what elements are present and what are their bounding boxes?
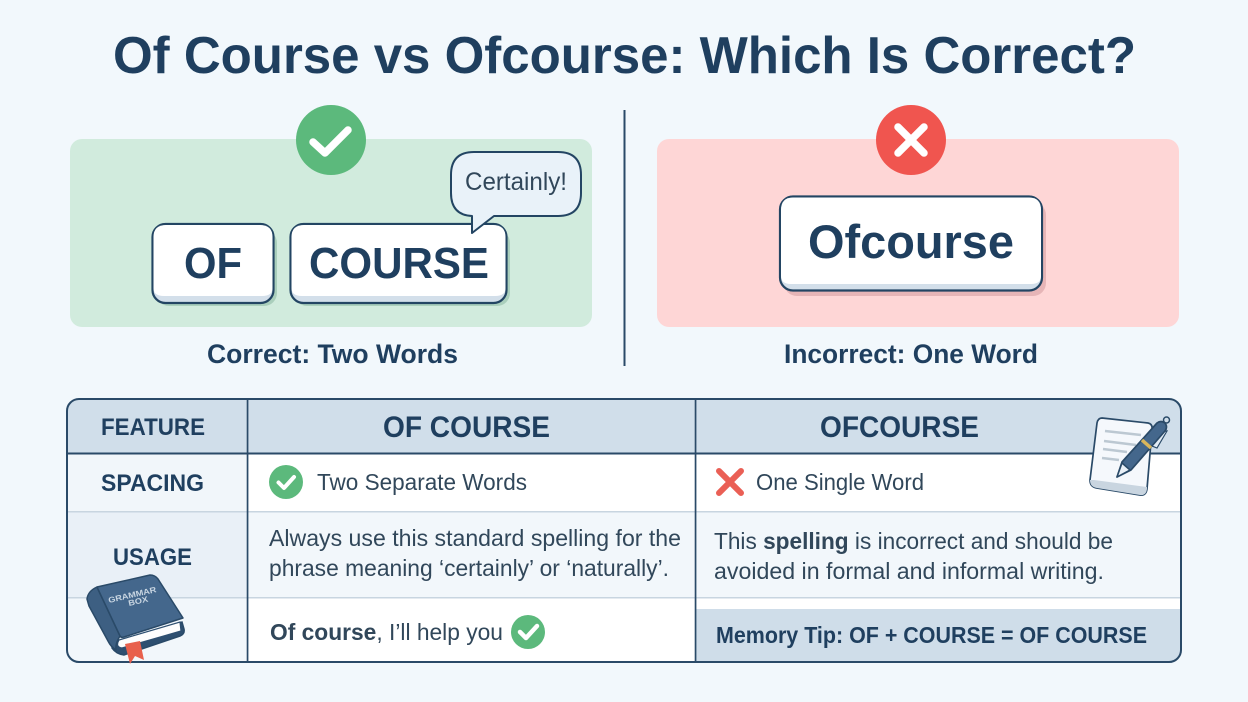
caption: correct: Correct: Two Words (207, 339, 458, 369)
usage: ofcourse: avoided in formal and informal writing. (714, 558, 1104, 584)
row label: spacing: SPACING (101, 470, 204, 497)
word card: COURSE (290, 224, 510, 306)
word card: OF (152, 224, 277, 306)
center divider (624, 110, 626, 366)
usage: of course: phrase meaning ‘certainly’ or ‘naturally’. (269, 555, 669, 581)
row label: usage: USAGE (113, 544, 192, 571)
icon: small green check (269, 465, 303, 499)
word card: OF: OF (184, 239, 242, 288)
icon: green check (296, 105, 366, 175)
usage: of course: Always use this standard spelling for the (269, 525, 681, 551)
speech bubble: Certainly! (465, 168, 567, 196)
icon: example check (511, 615, 545, 649)
usage: ofcourse (714, 528, 1113, 584)
table body background (67, 399, 1181, 662)
table header row (67, 399, 1181, 453)
speech bubble (451, 152, 581, 233)
icon: small red cross (719, 471, 741, 493)
header: feature: FEATURE (101, 414, 205, 441)
caption: incorrect: Incorrect: One Word (784, 339, 1038, 369)
icon: red cross (876, 105, 946, 175)
usage: ofcourse: This spelling is incorrect and should be (714, 528, 1113, 554)
comparison table (67, 399, 1181, 662)
usage row shading (248, 512, 1180, 597)
header: ofcourse: OFCOURSE (820, 411, 979, 444)
memory tip band (696, 609, 1181, 662)
title: Of Course vs Ofcourse: Which Is Correct? (113, 27, 1136, 85)
word card: Ofcourse (780, 196, 1046, 296)
icon: notepad and pen (1090, 417, 1170, 495)
panel: incorrect (657, 105, 1179, 369)
panel background: green (70, 139, 592, 327)
word card: COURSE: COURSE (309, 239, 489, 288)
spacing: of course: Two Separate Words (317, 469, 527, 495)
spacing: ofcourse: One Single Word (756, 469, 924, 495)
header: of course: OF COURSE (383, 411, 550, 444)
row label shading (67, 511, 247, 598)
icon: grammar book: GRAMMAR (107, 585, 157, 605)
memory tip: Memory Tip: OF + COURSE = OF COURSE (716, 622, 1147, 648)
example sentence: Of course, I’ll help you (270, 619, 503, 645)
icon: grammar book: BOX (127, 595, 150, 608)
panel: correct (70, 105, 592, 369)
panel background: red (657, 139, 1179, 327)
word card: Ofcourse: Ofcourse (808, 215, 1014, 268)
icon: grammar book (87, 575, 184, 664)
usage: of course (269, 525, 681, 581)
